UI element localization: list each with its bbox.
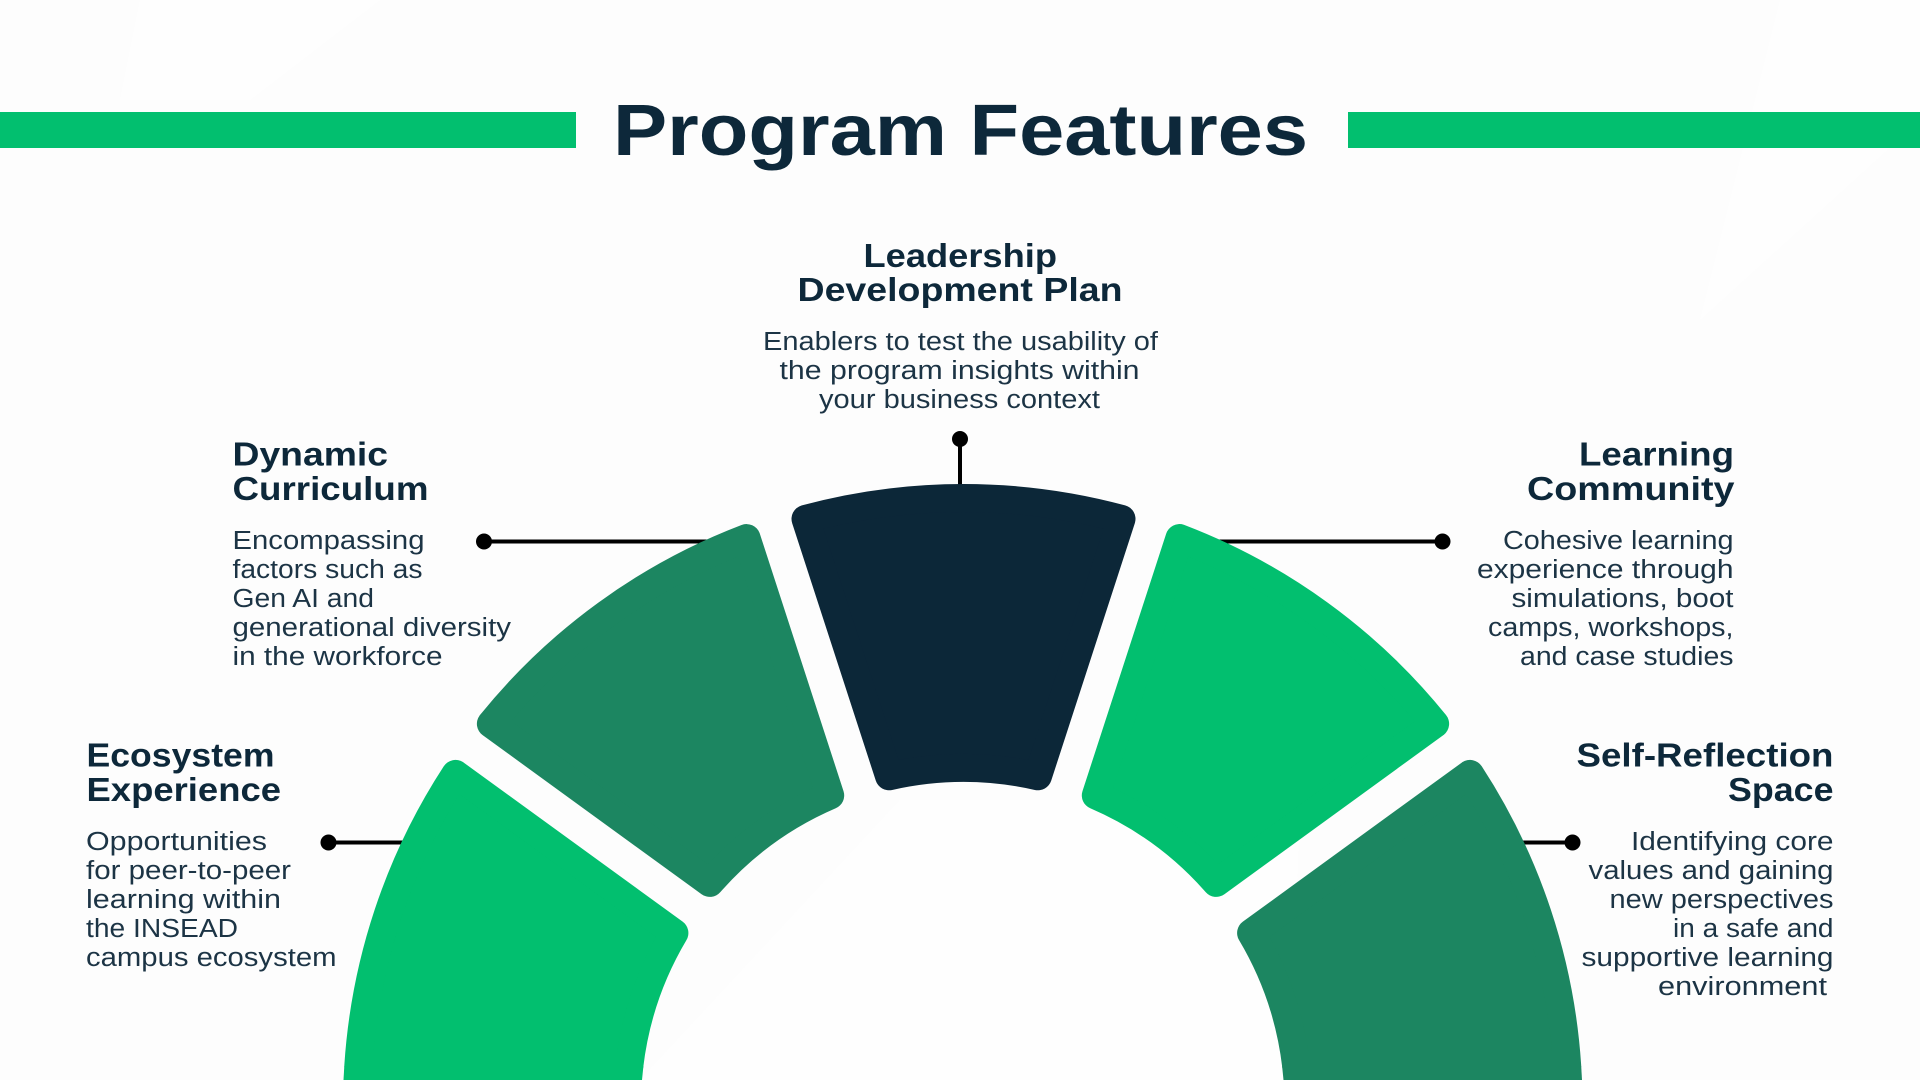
connector: Learning Community: [1200, 534, 1450, 550]
description: Leadership Development Plan: the program insights within: [780, 357, 1140, 385]
segment: Self-Reflection Space: [1251, 774, 1582, 1080]
title bar left: [0, 112, 576, 148]
description: Self-Reflection Space: supportive learning: [1582, 944, 1834, 972]
description: Leadership Development Plan: your business context: [819, 386, 1100, 414]
description: Self-Reflection Space: [1582, 828, 1834, 1001]
description: Learning Community: experience through: [1477, 556, 1734, 584]
description: Dynamic Curriculum: factors such as: [232, 556, 422, 584]
description: Leadership Development Plan: Enablers to test the usability of: [763, 328, 1159, 356]
title: Program Features: [613, 91, 1308, 171]
heading: Ecosystem Experience: Experience: [86, 771, 281, 808]
heading: Dynamic Curriculum: Curriculum: [232, 470, 428, 507]
heading: Self-Reflection Space: [1576, 736, 1834, 808]
heading: Dynamic Curriculum: Dynamic: [232, 436, 388, 472]
semicircle segments: [344, 498, 1582, 1080]
connector: Dynamic Curriculum: [476, 534, 730, 550]
description: Ecosystem Experience: for peer-to-peer: [86, 857, 292, 885]
segment: Ecosystem Experience: [344, 774, 674, 1080]
description: Self-Reflection Space: in a safe and: [1673, 915, 1834, 943]
heading: Ecosystem Experience: Ecosystem: [86, 736, 274, 774]
description: Learning Community: camps, workshops,: [1488, 614, 1734, 642]
heading: Learning Community: Learning: [1579, 436, 1734, 472]
text block: Ecosystem Experience: [86, 736, 336, 972]
segment: Learning Community: [1028, 521, 1447, 932]
segment: Leadership Development Plan: [806, 498, 1122, 776]
heading: Self-Reflection Space: Space: [1728, 771, 1834, 808]
heading: Leadership Development Plan: Leadership: [864, 237, 1057, 274]
description: Ecosystem Experience: learning within: [86, 886, 281, 914]
description: Dynamic Curriculum: in the workforce: [232, 643, 442, 671]
text block: Dynamic Curriculum: [232, 436, 511, 671]
heading: Learning Community: [1527, 436, 1735, 507]
heading: Learning Community: Community: [1527, 470, 1735, 507]
description: Ecosystem Experience: the INSEAD: [86, 915, 238, 943]
connector: Leadership Development Plan: [952, 431, 968, 490]
title bar right: [1348, 112, 1920, 148]
heading: Dynamic Curriculum: [232, 436, 428, 507]
description: Self-Reflection Space: new perspectives: [1610, 886, 1834, 914]
description: Self-Reflection Space: environment: [1658, 973, 1827, 1001]
heading: Leadership Development Plan: Development Plan: [798, 271, 1122, 308]
description: Self-Reflection Space: values and gaining: [1588, 857, 1834, 885]
text block: Self-Reflection Space: [1576, 736, 1834, 1001]
connector: Ecosystem Experience: [320, 834, 420, 850]
description: Dynamic Curriculum: [232, 527, 511, 671]
text block: Learning Community: [1477, 436, 1735, 671]
segment: Dynamic Curriculum: [479, 521, 898, 932]
description: Dynamic Curriculum: generational diversity: [232, 614, 511, 642]
heading: Ecosystem Experience: [86, 736, 281, 808]
description: Ecosystem Experience: [86, 828, 336, 972]
description: Dynamic Curriculum: Gen AI and: [232, 585, 374, 613]
connector: Self-Reflection Space: [1500, 834, 1580, 850]
description: Dynamic Curriculum: Encompassing: [232, 527, 424, 555]
heading: Leadership Development Plan: [798, 237, 1122, 308]
description: Learning Community: and case studies: [1520, 643, 1734, 671]
description: Leadership Development Plan: [763, 328, 1159, 414]
description: Ecosystem Experience: campus ecosystem: [86, 944, 336, 972]
text block: Leadership Development Plan: [763, 237, 1159, 414]
description: Learning Community: simulations, boot: [1512, 585, 1734, 613]
description: Learning Community: [1477, 527, 1734, 671]
description: Ecosystem Experience: Opportunities: [86, 828, 267, 856]
heading: Self-Reflection Space: Self-Reflection: [1576, 736, 1834, 774]
description: Self-Reflection Space: Identifying core: [1631, 828, 1834, 856]
description: Learning Community: Cohesive learning: [1503, 527, 1734, 555]
